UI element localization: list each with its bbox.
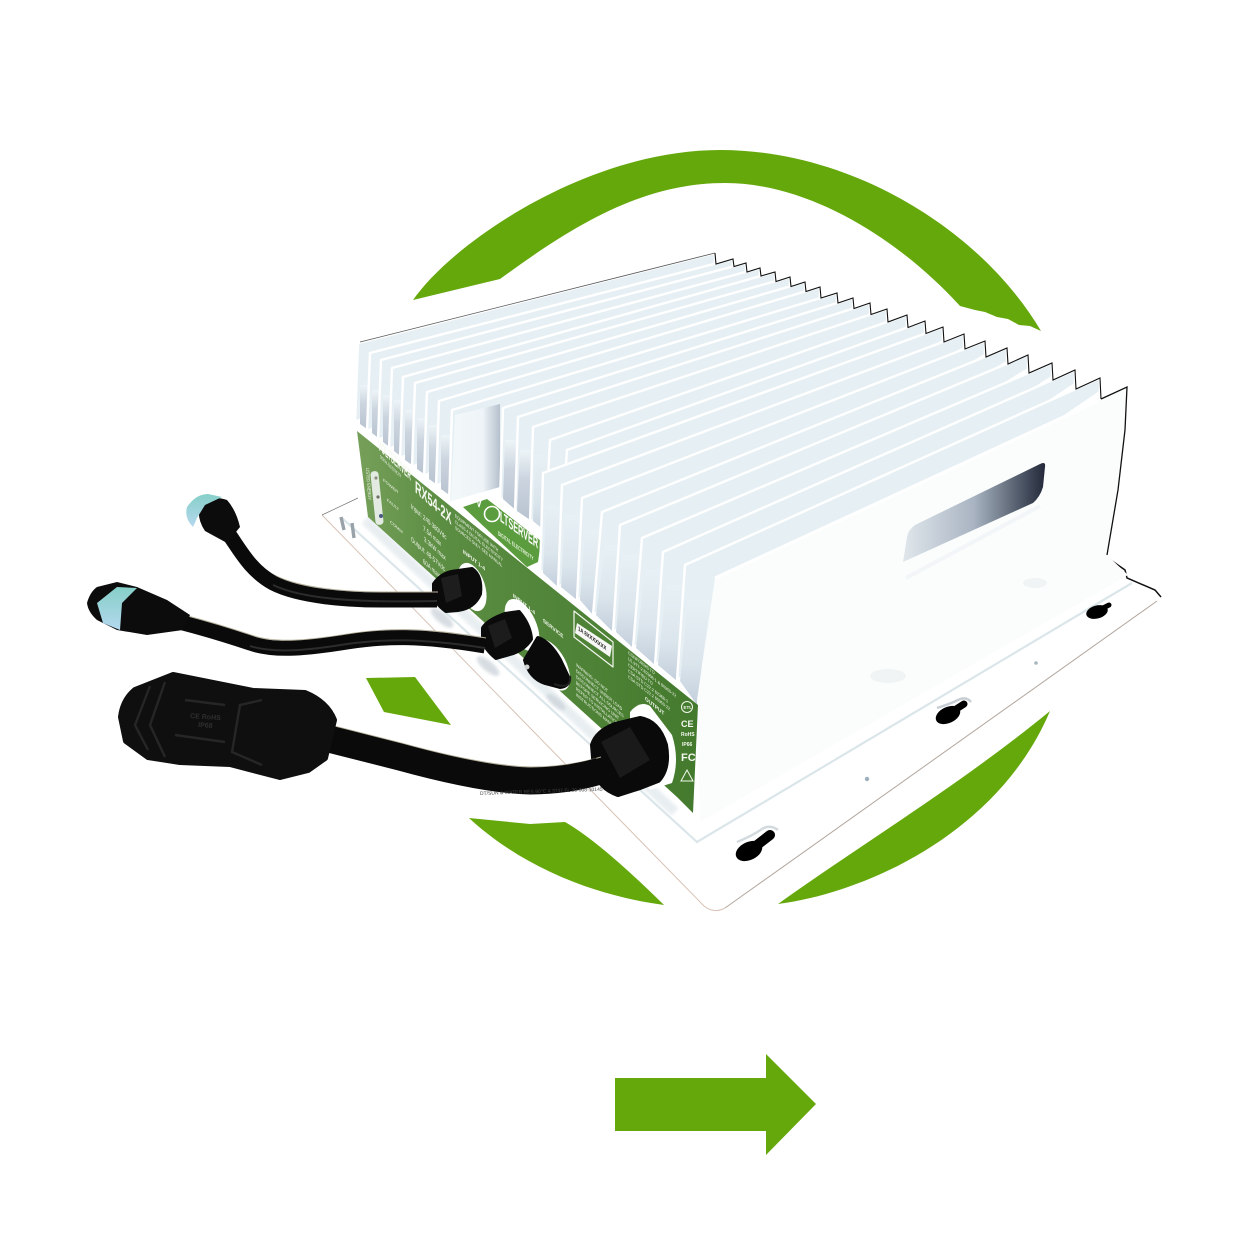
panel warning block: EQUIPMENT FOR USE WITH bbox=[455, 513, 498, 553]
compliance text block: CONFORMS TO bbox=[628, 650, 655, 676]
status LED strip bbox=[365, 468, 403, 535]
warning text block: INSTRUCTIONS MANUAL bbox=[576, 692, 618, 732]
panel port labels: SERVICE bbox=[543, 618, 564, 641]
middle connector bbox=[87, 582, 190, 635]
compliance text block: CSA STD C22.2 60950-22 bbox=[628, 674, 670, 712]
panel port labels: INPUT 1-4 bbox=[513, 593, 536, 617]
device: base plate bbox=[322, 497, 1161, 911]
base plate inner ridge bbox=[342, 518, 1132, 842]
status LED strip: COMM bbox=[390, 520, 403, 535]
label: green VoltServer logo plate: LTSERVER bbox=[500, 508, 538, 552]
label: green VoltServer logo plate: DIGITAL ELECTRICITY bbox=[498, 530, 534, 563]
label: green VoltServer logo plate bbox=[463, 495, 541, 567]
compliance text block: CSA STD C22.2 62368-1 bbox=[628, 668, 668, 705]
ridge shadow patches bbox=[428, 605, 568, 713]
serial number tag: 1A 8XXXXXXX bbox=[578, 626, 607, 653]
panel ratings text: Input: 240-380Vdc bbox=[411, 503, 447, 543]
gland: service cap bbox=[524, 634, 578, 696]
end plate handle slot bbox=[903, 463, 1045, 562]
floor under middle fins bbox=[451, 487, 548, 575]
panel warning block: SOURCES ONLY. SEE MANUAL bbox=[455, 525, 503, 569]
fin group: front bbox=[540, 327, 1100, 705]
panel ratings text bbox=[411, 503, 447, 581]
panel: green connector label bbox=[357, 431, 698, 813]
warning text block: DISCONNECT UNDER LOAD bbox=[576, 668, 623, 712]
cable: middle connector lead bbox=[87, 582, 486, 650]
panel logo text: VOLTSERVER bbox=[378, 438, 411, 485]
fin group: middle bbox=[500, 298, 925, 548]
cable: large output lead bbox=[121, 675, 603, 797]
fin group: rear left bbox=[355, 253, 837, 503]
gland: input port two bbox=[483, 594, 547, 658]
panel port labels: OUTPUT bbox=[645, 696, 665, 718]
base plate lower right edge bbox=[725, 601, 1157, 908]
warning text block bbox=[576, 662, 623, 732]
panel ratings text: 3.3kW max bbox=[424, 536, 446, 563]
gland: input port one bbox=[434, 559, 492, 615]
compliance text block: UL 977-2:62368-1 & 60950-22 bbox=[628, 656, 677, 699]
panel port labels bbox=[463, 549, 665, 718]
fin tip outline bbox=[715, 253, 1101, 399]
certification marks: CE bbox=[681, 719, 694, 729]
arrow: green right arrow bbox=[615, 1054, 816, 1155]
top connector bbox=[199, 498, 240, 543]
status LED strip: POWER bbox=[383, 478, 399, 495]
icon: keyhole mounting holes bbox=[733, 603, 1109, 865]
device: end plate bbox=[697, 387, 1128, 822]
label: green VoltServer logo plate: V bbox=[476, 495, 482, 513]
base plate top corner outline bbox=[1105, 556, 1161, 597]
base plate lower left edge bbox=[322, 515, 725, 911]
warning text block: DISCONNECT ALL SOURCES bbox=[576, 674, 623, 719]
compliance text block bbox=[628, 650, 677, 712]
cable: large output lead: CE RoHS bbox=[190, 713, 221, 722]
certification marks: IP66 bbox=[682, 742, 693, 748]
cable: large output lead: IP68 bbox=[198, 722, 213, 730]
panel ratings text: 7.5A max bbox=[423, 525, 442, 549]
compliance text block: CERTIFIED TO bbox=[628, 662, 653, 687]
arc: lower left green swoosh bbox=[469, 818, 664, 905]
serial number tag bbox=[574, 611, 613, 667]
warning text block: BEFORE SERVICING UNIT bbox=[576, 680, 619, 721]
panel model heading: RX54-2X bbox=[415, 478, 452, 530]
certification marks: FC bbox=[681, 752, 696, 764]
panel warning block: CLASS 4 DIGITAL ELECTRICITY bbox=[455, 519, 503, 563]
warning text block: REFER TO INSTALLATION bbox=[576, 686, 618, 726]
arc: small green fragment bbox=[366, 677, 451, 725]
warning text block: WARNING: DO NOT bbox=[576, 662, 608, 694]
gland: output port bbox=[593, 704, 676, 794]
arc: lower right green swoosh bbox=[778, 711, 1050, 904]
panel: green connector label: DIGITAL ELECTRICITY bbox=[380, 453, 401, 480]
cable: top connector lead bbox=[186, 494, 438, 601]
status LED strip: FAULT bbox=[387, 498, 399, 512]
certification marks bbox=[681, 702, 696, 781]
panel side certification text: LISTED ENERGY bbox=[365, 468, 372, 500]
certification marks: ETL bbox=[684, 705, 692, 710]
large connector body bbox=[121, 675, 334, 777]
certification marks: RoHS bbox=[681, 732, 695, 738]
panel port labels: INPUT 1-4 bbox=[463, 549, 486, 573]
cable: large output lead: DT/SUN & WATER RES 90°C 4 3747 FL 20-008-10145 bbox=[480, 787, 603, 797]
device: heat sink fins bbox=[355, 253, 1101, 705]
screws bbox=[341, 517, 354, 538]
arc: top green swoosh bbox=[413, 150, 1041, 331]
panel ratings text: Output: 48-57Vdc bbox=[411, 536, 445, 574]
panel ratings text: 60A max bbox=[423, 558, 440, 581]
